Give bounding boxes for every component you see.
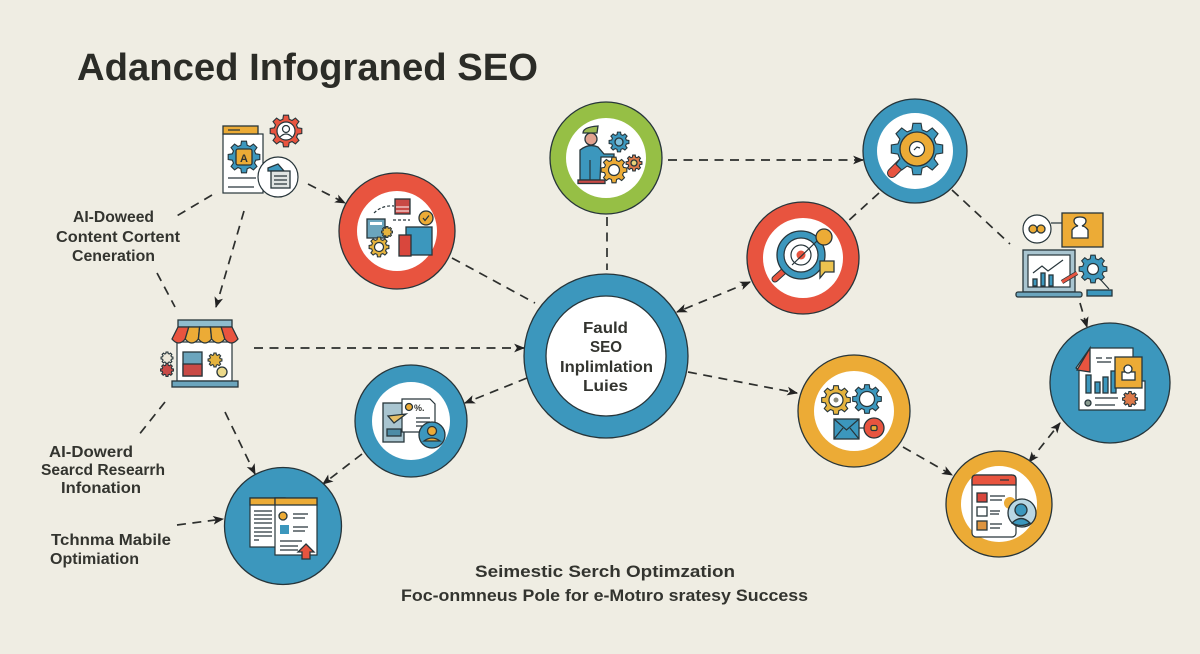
icon: laptop analytics <box>1016 213 1112 297</box>
hub label: Luies <box>583 378 628 395</box>
panel: yellow checklist circle <box>946 451 1052 557</box>
text block: content generation label: Ceneration <box>72 248 155 265</box>
icon: content document with gears <box>223 115 302 197</box>
icon: documents with upload arrow <box>250 498 317 559</box>
panel: red target circle <box>747 202 859 314</box>
icon: checklist with avatar <box>972 475 1036 537</box>
icon: person with gears <box>578 126 642 184</box>
text block: search research label: Infonation <box>61 480 141 497</box>
icon: magnifier gear <box>891 123 943 175</box>
text block: search research label: AI-Dowerd <box>49 444 133 461</box>
hub label <box>560 320 653 395</box>
text block: mobile optimisation label <box>50 532 171 568</box>
text block: content generation label: Content Cortent <box>56 229 180 246</box>
text block: search research label <box>41 444 165 497</box>
text block: search research label: Searcd Researrh <box>41 462 165 479</box>
text block: bottom caption: Seimestic Serch Optimzation <box>475 562 735 581</box>
text block: mobile optimisation label: Tchnma Mabile <box>51 532 171 549</box>
icon: report document <box>1076 348 1145 410</box>
text block: content generation label <box>56 209 180 265</box>
icon: target magnifier <box>775 229 834 279</box>
text block: content generation label: AI-Doweed <box>73 209 154 226</box>
panel: yellow email circle <box>798 355 910 467</box>
hub label: SEO <box>590 339 622 356</box>
panel: red workflow circle <box>339 173 455 289</box>
dashed connector network <box>138 160 1087 525</box>
text block: bottom caption <box>401 562 808 605</box>
icon: documents with avatar: %. <box>414 403 425 413</box>
panel: blue mid-left offer circle <box>355 365 467 477</box>
hub label: Inplimlation <box>560 359 653 376</box>
icon: content document with gears: A <box>240 153 248 165</box>
text block: mobile optimisation label: Optimiation <box>50 551 139 568</box>
text block: bottom caption: Foc-onmneus Pole for e-Motıro sratesy Success <box>401 586 808 605</box>
icon: gears and envelope <box>822 385 884 439</box>
title: Adanced Infograned SEO <box>77 47 538 89</box>
icon: storefront laptop <box>161 320 238 387</box>
icon: workflow tools <box>367 199 433 257</box>
hub label: Fauld <box>583 320 628 337</box>
panel: blue search gear circle <box>863 99 967 203</box>
panel: blue solid page circle <box>224 468 342 584</box>
panel: blue report circle <box>1050 323 1170 443</box>
panel: central hub circle <box>524 274 688 438</box>
panel: green team circle <box>550 102 662 214</box>
